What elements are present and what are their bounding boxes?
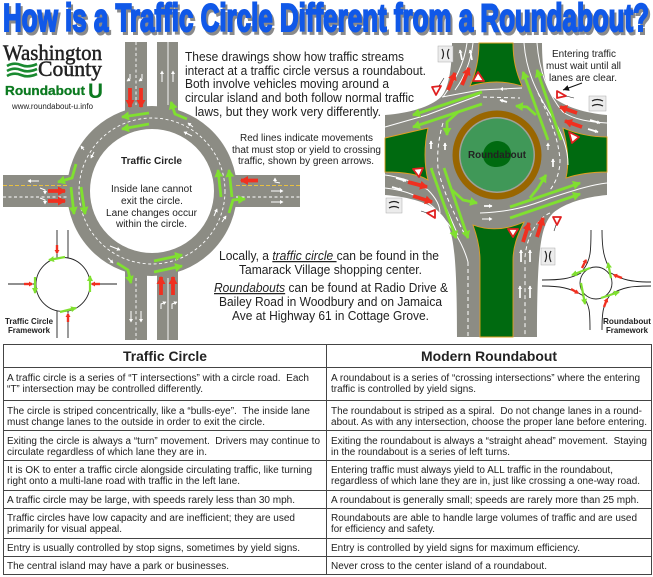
- note: red lines: traffic, shown by green arrows.: [238, 156, 374, 167]
- note: entering traffic: [546, 49, 621, 84]
- column: traffic circle rows: “T” intersection may be controlled differently.: [7, 384, 203, 395]
- intro text: Both involve vehicles moving around a: [185, 77, 389, 91]
- column: roundabout rows: Exiting the roundabout is always a “straight ahead” movement. Staying: [331, 436, 647, 447]
- splitter islands: [385, 43, 607, 337]
- arrow: to yield sign: [563, 83, 582, 90]
- column: roundabout rows: [331, 373, 647, 572]
- locations text: Bailey Road in Woodbury and on Jamaica: [219, 295, 442, 309]
- lane sign panels: [386, 46, 606, 265]
- note: entering traffic: must wait until all: [546, 61, 621, 72]
- locations text: Locally, a traffic circle can be found in the: [219, 249, 439, 263]
- central island: [452, 110, 542, 200]
- note: inside lane: exit the circle.: [121, 196, 183, 207]
- column header: traffic circle: Traffic Circle: [123, 348, 207, 364]
- column header: modern roundabout: Modern Roundabout: [421, 348, 557, 364]
- note: red lines: [232, 133, 381, 167]
- column: roundabout rows: The roundabout is striped as a spiral. Do not change lanes in a round-: [331, 406, 642, 417]
- intro text: [185, 50, 426, 119]
- label: roundabout framework: Framework: [606, 325, 648, 335]
- column: roundabout rows: in the roundabout is a series of left turns.: [331, 447, 510, 458]
- logo: Washington County Roundabout U: www.roundabout-u.info: [11, 102, 94, 111]
- column: traffic circle rows: must change lanes to the outside in order to exit the circle.: [7, 417, 265, 428]
- column: roundabout rows: about. As with any intersection, choose the proper lane before entering.: [331, 417, 647, 428]
- label: traffic circle framework: Traffic Circle: [5, 316, 53, 326]
- small white pavement arrows: [392, 50, 600, 298]
- column: roundabout rows: for efficiency and safety.: [331, 524, 435, 535]
- intro text: These drawings show how traffic streams: [185, 50, 404, 64]
- column: roundabout rows: traffic is controlled by yield signs.: [331, 384, 476, 395]
- label: roundabout framework: Roundabout: [603, 316, 651, 326]
- locations text: Tamarack Village shopping center.: [239, 263, 422, 277]
- red entering arrows: [408, 68, 582, 242]
- intro text: interact at a traffic circle versus a roundabout.: [185, 64, 426, 78]
- column: traffic circle rows: It is OK to enter a traffic circle alongside circulating traffic, like turning: [7, 465, 312, 476]
- intro text: laws, but they work very differently.: [195, 105, 381, 119]
- column: traffic circle rows: A traffic circle is a series of “T intersections” with a circle road. Each: [7, 373, 309, 384]
- diagram: traffic circle: [3, 42, 300, 340]
- lane markings: [385, 43, 607, 337]
- note: entering traffic: lanes are clear.: [549, 73, 617, 84]
- column: traffic circle rows: circulate regardless of which lane they are in.: [7, 447, 207, 458]
- column: traffic circle rows: Traffic circles have low capacity and are inefficient; they are used: [7, 513, 295, 524]
- note: red lines: that must stop or yield to crossing: [232, 145, 381, 156]
- logo: Washington County Roundabout U: U: [88, 80, 103, 103]
- logo: Washington County Roundabout U: Washington: [3, 40, 102, 65]
- column: roundabout rows: Roundabouts are able to handle large volumes of traffic and are used: [331, 513, 637, 524]
- locations text: Roundabouts can be found at Radio Drive &: [214, 281, 449, 295]
- label: traffic circle framework: [5, 316, 53, 335]
- label: traffic circle framework: Framework: [8, 325, 50, 335]
- column: traffic circle rows: A traffic circle may be large, with speeds rarely less than 30 mph.: [7, 495, 295, 506]
- locations text: [214, 249, 449, 323]
- column: traffic circle rows: Exiting the circle is always a “turn” movement. Drivers may continue to: [7, 436, 320, 447]
- note: inside lane: within the circle.: [115, 219, 187, 230]
- framework: traffic circle: [5, 230, 117, 338]
- note: inside lane: Lane changes occur: [106, 208, 198, 219]
- column: traffic circle rows: [7, 373, 320, 572]
- logo: Washington County Roundabout U: County: [38, 56, 102, 81]
- circular road: [78, 118, 226, 264]
- column: traffic circle rows: primarily for visual appeal.: [7, 524, 122, 535]
- label: roundabout framework: [603, 316, 651, 335]
- framework: roundabout: [542, 230, 651, 335]
- green circulating arrows: [413, 70, 580, 238]
- red entering arrows: [48, 88, 258, 295]
- table grid: [4, 344, 652, 574]
- column: roundabout rows: regardless of which lane they are in, just like crossing a one-way road.: [331, 476, 640, 487]
- diagram: modern roundabout: [385, 43, 607, 337]
- label: traffic circle: Traffic Circle: [121, 155, 182, 167]
- approach roads: [3, 42, 300, 340]
- note: inside lane: Inside lane cannot: [111, 184, 192, 195]
- comparison table: [4, 344, 652, 574]
- column: traffic circle rows: The circle is striped concentrically, like a “bulls-eye”. The inside lane: [7, 406, 310, 417]
- column: roundabout rows: Entering traffic must always yield to ALL traffic in the roundabout,: [331, 465, 613, 476]
- column: traffic circle rows: Entry is usually controlled by stop signs, sometimes by yield signs.: [7, 543, 300, 554]
- column: traffic circle rows: right onto a multi-lane road with traffic in the left lane.: [7, 476, 240, 487]
- small white pavement arrows: [28, 71, 283, 322]
- yield signs: [413, 72, 579, 237]
- green circulating arrows: [58, 102, 245, 283]
- logo: Washington County Roundabout U: Roundabout: [5, 84, 86, 98]
- lane markings: [3, 42, 300, 340]
- locations text: Ave at Highway 61 in Cottage Grove.: [232, 309, 429, 323]
- column: traffic circle rows: The central island may have a park or businesses.: [7, 561, 229, 572]
- column: roundabout rows: Entry is controlled by yield signs for maximum efficiency.: [331, 543, 580, 554]
- intro text: circular island and both follow normal traffic: [185, 91, 414, 105]
- road surface: [385, 43, 607, 337]
- column: roundabout rows: A roundabout is generally small; speeds are rarely more than 25 mph.: [331, 495, 639, 506]
- note: red lines: Red lines indicate movements: [240, 133, 373, 144]
- column: roundabout rows: A roundabout is a series of “crossing intersections” where the entering: [331, 373, 640, 384]
- label: roundabout: Roundabout: [468, 149, 526, 161]
- logo: Washington County Roundabout U: [3, 40, 103, 111]
- note: inside lane: [106, 184, 198, 230]
- note: entering traffic: Entering traffic: [552, 49, 616, 60]
- column: roundabout rows: Never cross to the center island of a roundabout.: [331, 561, 547, 572]
